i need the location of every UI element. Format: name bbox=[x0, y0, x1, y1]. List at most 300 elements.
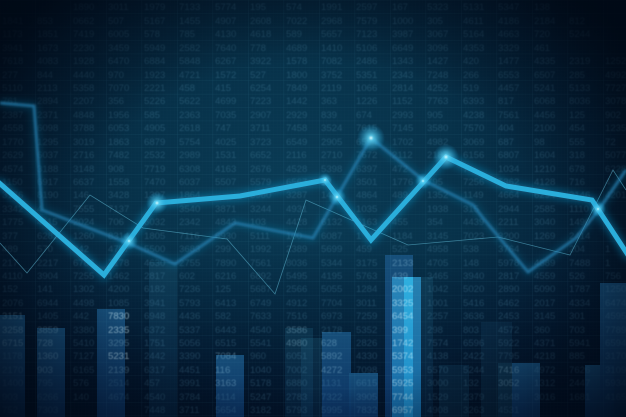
number table: 3145 bbox=[534, 311, 555, 322]
number table: 455 bbox=[392, 217, 408, 228]
thin line bbox=[0, 170, 626, 294]
number table: 7145 bbox=[392, 123, 413, 134]
number table: 2100 bbox=[534, 123, 555, 134]
bar 8 bbox=[349, 373, 378, 417]
main thick line bbox=[0, 157, 626, 275]
number table: 5351 bbox=[356, 70, 377, 81]
number table: 905 bbox=[427, 110, 443, 121]
number table: 4238 bbox=[463, 110, 484, 121]
number table: 301 bbox=[569, 311, 585, 322]
number table: 6254 bbox=[250, 83, 272, 94]
number table: 5495 bbox=[286, 271, 307, 282]
number table: 360 bbox=[534, 325, 550, 336]
number table: 6917 bbox=[37, 177, 58, 188]
number table: 100 bbox=[286, 231, 302, 242]
number table: 6948 bbox=[144, 311, 165, 322]
number table: 2002 bbox=[392, 284, 413, 295]
number table: 5056 bbox=[179, 338, 200, 349]
number table: 6317 bbox=[144, 365, 165, 376]
number table: 7570 bbox=[463, 123, 484, 134]
number table: 4110 bbox=[2, 271, 23, 282]
number table: 1042 bbox=[427, 284, 448, 295]
number table: 3000 bbox=[427, 378, 448, 389]
number table: 6880 bbox=[286, 378, 307, 389]
number table: 1742 bbox=[392, 338, 413, 349]
number table: 363 bbox=[321, 96, 337, 107]
number table: 3941 bbox=[144, 298, 165, 309]
number table: 7133 bbox=[179, 2, 200, 13]
number table: 5774 bbox=[215, 2, 237, 13]
number table: 1149 bbox=[463, 190, 484, 201]
number table: 7098 bbox=[356, 365, 377, 376]
bar 9 bbox=[385, 255, 413, 417]
number table: 703 bbox=[569, 325, 585, 336]
number table: 585 bbox=[144, 110, 160, 121]
number table: 2389 bbox=[286, 244, 307, 255]
number table: 7419 bbox=[73, 29, 94, 40]
number table: 1405 bbox=[37, 311, 58, 322]
number table: 5111 bbox=[250, 231, 270, 242]
number table: 8036 bbox=[286, 258, 307, 269]
number table: 3011 bbox=[108, 2, 129, 13]
number table: 6594 bbox=[605, 338, 626, 349]
number table: 420 bbox=[463, 56, 479, 67]
number table: 204 bbox=[569, 244, 586, 255]
number table: 18 bbox=[321, 177, 332, 188]
number table: 1 bbox=[605, 244, 610, 255]
number table: 3019 bbox=[73, 137, 94, 148]
number table: 4699 bbox=[215, 96, 236, 107]
number table: 7259 bbox=[356, 311, 377, 322]
number table: 3146 bbox=[569, 190, 590, 201]
number table: 5922 bbox=[498, 338, 519, 349]
number table: 1604 bbox=[534, 150, 556, 161]
number table: 2486 bbox=[356, 56, 377, 67]
number table: 3752 bbox=[321, 70, 342, 81]
number table: 0662 bbox=[73, 16, 94, 27]
number table: 574 bbox=[286, 2, 303, 13]
number table: 356 bbox=[108, 96, 124, 107]
number table: 716 bbox=[569, 177, 585, 188]
number table: 7022 bbox=[286, 16, 307, 27]
number table: 2514 bbox=[108, 378, 130, 389]
number table: 1343 bbox=[392, 56, 413, 67]
number table: 4843 bbox=[215, 217, 236, 228]
number table: 4992 bbox=[605, 70, 626, 81]
number table: 970 bbox=[108, 70, 124, 81]
number table: 3342 bbox=[2, 204, 23, 215]
number table: 1751 bbox=[144, 338, 165, 349]
bar 2 bbox=[37, 328, 65, 417]
number table: 752 bbox=[2, 405, 18, 416]
number table: 6413 bbox=[215, 298, 236, 309]
number table: 1673 bbox=[37, 43, 58, 54]
number table: 217 bbox=[2, 258, 18, 269]
number table: 2343 bbox=[392, 70, 413, 81]
number table: 2379 bbox=[463, 392, 484, 403]
number table: 354 bbox=[427, 217, 444, 228]
number table: 4864 bbox=[356, 190, 378, 201]
number table: 3784 bbox=[179, 392, 201, 403]
number table: 853 bbox=[37, 16, 53, 27]
number table: 4611 bbox=[463, 16, 484, 27]
number table: 7618 bbox=[2, 56, 23, 67]
number table: 2968 bbox=[321, 16, 342, 27]
number table: 7516 bbox=[286, 311, 307, 322]
number table: 2024 bbox=[73, 217, 95, 228]
number table: 2184 bbox=[534, 16, 556, 27]
number table: 885 bbox=[569, 351, 585, 362]
number table: 3465 bbox=[427, 271, 448, 282]
number table: 778 bbox=[250, 43, 266, 54]
number table: 5110 bbox=[2, 83, 23, 94]
number table: 2112 bbox=[392, 150, 413, 161]
number table: 415 bbox=[215, 83, 231, 94]
number table: 6098 bbox=[37, 123, 58, 134]
bar 7 bbox=[322, 332, 351, 417]
number table: 7789 bbox=[605, 325, 626, 336]
bar chart bbox=[0, 255, 626, 417]
number table: 1 bbox=[356, 231, 361, 242]
number table: 2221 bbox=[144, 83, 165, 94]
number table: 5763 bbox=[356, 271, 377, 282]
number table: 2618 bbox=[179, 123, 200, 134]
number table: 527 bbox=[250, 70, 266, 81]
number table: 7002 bbox=[286, 365, 307, 376]
number table: 3188 bbox=[37, 164, 58, 175]
number table: 461 bbox=[534, 43, 550, 54]
number table: 4 bbox=[37, 204, 43, 215]
number table: 3991 bbox=[179, 378, 200, 389]
number table: 7719 bbox=[144, 164, 165, 175]
number table: 1284 bbox=[356, 284, 378, 295]
number table: 678 bbox=[569, 164, 585, 175]
number table: 6649 bbox=[392, 43, 413, 54]
number table: 2116 bbox=[286, 150, 307, 161]
number table: 602 bbox=[179, 271, 195, 282]
number table: 472 bbox=[392, 164, 408, 175]
number table: 4451 bbox=[179, 365, 200, 376]
bottom shading bbox=[0, 240, 626, 417]
number table: 4972 bbox=[534, 365, 555, 376]
number table: 7640 bbox=[215, 43, 236, 54]
number table: 3987 bbox=[392, 29, 413, 40]
number table: 7123 bbox=[356, 29, 377, 40]
number table: 7322 bbox=[321, 392, 342, 403]
number table: 5231 bbox=[108, 351, 129, 362]
number table: 4905 bbox=[144, 123, 165, 134]
number table: 5344 bbox=[321, 258, 343, 269]
number table: 3940 bbox=[463, 271, 484, 282]
number table: 4674 bbox=[108, 392, 130, 403]
number table: 5090 bbox=[534, 284, 555, 295]
number table: 526 bbox=[569, 271, 585, 282]
number table: 3325 bbox=[392, 298, 413, 309]
number table: 1923 bbox=[144, 70, 165, 81]
number table: 5949 bbox=[144, 43, 165, 54]
number table: 7070 bbox=[108, 83, 129, 94]
number table: 3711 bbox=[250, 123, 271, 134]
number table: 628 bbox=[321, 338, 337, 349]
number table: 6884 bbox=[144, 56, 166, 67]
number table: 1462 bbox=[108, 271, 129, 282]
number table: 7023 bbox=[463, 231, 484, 242]
number table: 5167 bbox=[144, 16, 165, 27]
number table: 942 bbox=[73, 244, 89, 255]
number table: 5106 bbox=[356, 43, 377, 54]
number table: 1928 bbox=[73, 56, 94, 67]
number table: 7890 bbox=[215, 258, 236, 269]
number table: 298 bbox=[427, 325, 443, 336]
number table: 2814 bbox=[392, 83, 414, 94]
number table: 2890 bbox=[498, 284, 519, 295]
number table: 6037 bbox=[179, 177, 200, 188]
bar 13 bbox=[600, 283, 626, 417]
number table: 761 bbox=[2, 96, 18, 107]
number table: 5323 bbox=[427, 2, 448, 13]
number table: 3636 bbox=[463, 311, 484, 322]
number table: 7832 bbox=[356, 405, 377, 416]
number table: 5570 bbox=[427, 365, 448, 376]
number table: 299 bbox=[215, 244, 231, 255]
number table: 5622 bbox=[179, 96, 200, 107]
number table: 5507 bbox=[215, 177, 236, 188]
number table: 148 bbox=[463, 258, 479, 269]
number table: 1775 bbox=[2, 217, 23, 228]
number table: 98 bbox=[534, 137, 545, 148]
number table: 5657 bbox=[321, 29, 342, 40]
number table: 6454 bbox=[392, 311, 414, 322]
number table: 457 bbox=[144, 378, 160, 389]
number table: 3329 bbox=[498, 43, 519, 54]
number table: 1938 bbox=[427, 204, 448, 215]
number table: 315 bbox=[463, 204, 479, 215]
number table: 6549 bbox=[286, 137, 307, 148]
number table: 4115 bbox=[37, 217, 58, 228]
number table: 7127 bbox=[73, 351, 94, 362]
number table: 6944 bbox=[37, 298, 59, 309]
number table: 4574 bbox=[2, 164, 24, 175]
number table: 1991 bbox=[321, 2, 342, 13]
number table: 3151 bbox=[2, 311, 23, 322]
number table: 2363 bbox=[179, 110, 200, 121]
number table: 2905 bbox=[321, 137, 342, 148]
number table: 7561 bbox=[250, 258, 271, 269]
number table: 1235 bbox=[605, 123, 626, 134]
number table: 4439 bbox=[463, 217, 484, 228]
number table: 2342 bbox=[179, 217, 200, 228]
number table: 6397 bbox=[356, 164, 377, 175]
number table: 2076 bbox=[2, 298, 23, 309]
number table: 7633 bbox=[250, 311, 271, 322]
number table: 3263 bbox=[463, 405, 484, 416]
number table: 1531 bbox=[215, 150, 236, 161]
number table: 674 bbox=[356, 110, 373, 121]
number table: 3922 bbox=[250, 56, 271, 67]
number table: 3163 bbox=[215, 378, 236, 389]
number table: 7672 bbox=[356, 150, 377, 161]
bar 10 bbox=[392, 277, 421, 417]
number table: 1864 bbox=[179, 190, 201, 201]
number table: 3175 bbox=[356, 258, 377, 269]
number table: 6282 bbox=[37, 231, 58, 242]
number table: 3788 bbox=[73, 123, 94, 134]
number table: 5352 bbox=[356, 325, 377, 336]
number table: 1578 bbox=[286, 56, 307, 67]
number table: 7116 bbox=[179, 231, 200, 242]
number table: 1360 bbox=[37, 351, 58, 362]
number table: 6393 bbox=[463, 96, 484, 107]
number table: 803 bbox=[463, 325, 479, 336]
number table: 3148 bbox=[73, 164, 94, 175]
number table: 4252 bbox=[427, 83, 448, 94]
number table: 3459 bbox=[108, 43, 129, 54]
number table: 785 bbox=[179, 29, 195, 40]
number table: 7256 bbox=[463, 177, 484, 188]
number table: 2532 bbox=[144, 150, 165, 161]
number table: 4889 bbox=[534, 258, 555, 269]
number table: 1312 bbox=[534, 378, 555, 389]
number table: 5699 bbox=[321, 244, 342, 255]
number table: 141 bbox=[37, 284, 53, 295]
number table: 6749 bbox=[250, 298, 271, 309]
number table: 4201 bbox=[605, 190, 626, 201]
number table: 3380 bbox=[73, 325, 94, 336]
number table: 3764 bbox=[498, 244, 520, 255]
number table: 7448 bbox=[144, 405, 165, 416]
number table: 4371 bbox=[534, 338, 555, 349]
bar 1 bbox=[0, 315, 25, 417]
number table: 4618 bbox=[250, 29, 271, 40]
number table: 4163 bbox=[215, 164, 236, 175]
number table: 3145 bbox=[427, 231, 448, 242]
number table: 2710 bbox=[321, 150, 342, 161]
number table: 6372 bbox=[144, 325, 165, 336]
number table: 6037 bbox=[37, 150, 58, 161]
number table: 116 bbox=[215, 365, 230, 376]
number table: 1260 bbox=[73, 231, 94, 242]
number table: 399 bbox=[392, 325, 408, 336]
number table: 318 bbox=[569, 150, 585, 161]
number table: 4130 bbox=[215, 29, 236, 40]
number table: 720 bbox=[534, 29, 550, 40]
number table: 1150 bbox=[2, 177, 23, 188]
number table: 7137 bbox=[108, 204, 129, 215]
bar 12 bbox=[585, 365, 614, 417]
number table: 2422 bbox=[463, 351, 484, 362]
number table: 152 bbox=[2, 284, 18, 295]
number table: 3078 bbox=[605, 96, 626, 107]
number table: 795 bbox=[427, 177, 443, 188]
number table: 4195 bbox=[321, 271, 342, 282]
number table: 1001 bbox=[427, 298, 448, 309]
number table: 6892 bbox=[250, 271, 271, 282]
number table: 1252 bbox=[605, 56, 626, 67]
number table: 1787 bbox=[569, 284, 590, 295]
number table: 2582 bbox=[179, 43, 200, 54]
number table: 4958 bbox=[427, 244, 448, 255]
number table: 1250 bbox=[605, 284, 626, 295]
number table: 4025 bbox=[215, 137, 236, 148]
number table: 3871 bbox=[215, 204, 236, 215]
number table: 4648 bbox=[498, 392, 519, 403]
number table: 4334 bbox=[569, 298, 591, 309]
number table: 6637 bbox=[73, 177, 94, 188]
number table: 5374 bbox=[392, 351, 414, 362]
number table: 6308 bbox=[179, 164, 200, 175]
number table: 4330 bbox=[356, 351, 377, 362]
number table: 2119 bbox=[321, 83, 342, 94]
number table: 5247 bbox=[250, 392, 271, 403]
number table: 1770 bbox=[2, 137, 23, 148]
number table: 8190 bbox=[37, 190, 58, 201]
number table: 1776 bbox=[392, 177, 413, 188]
number table: 1979 bbox=[144, 2, 165, 13]
number table: 2017 bbox=[534, 298, 555, 309]
number table: 7615 bbox=[356, 123, 377, 134]
number table: 489 bbox=[2, 244, 18, 255]
number table: 5500 bbox=[144, 244, 165, 255]
number table: 2257 bbox=[427, 311, 448, 322]
number table: 6005 bbox=[108, 29, 129, 40]
number table: 1 bbox=[605, 258, 610, 269]
number table: 3016 bbox=[534, 392, 555, 403]
number table: 2387 bbox=[2, 110, 23, 121]
number table: 6068 bbox=[534, 96, 555, 107]
number table: 125 bbox=[215, 284, 231, 295]
number table: 4559 bbox=[534, 271, 555, 282]
number table: 3069 bbox=[463, 137, 484, 148]
number table: 3052 bbox=[498, 378, 519, 389]
number table: 7 bbox=[463, 164, 468, 175]
number table: 4531 bbox=[498, 405, 519, 416]
number table: 6294 bbox=[534, 190, 556, 201]
number table: 4595 bbox=[605, 311, 626, 322]
number table: 3904 bbox=[37, 271, 59, 282]
number table: 4335 bbox=[534, 56, 555, 67]
number table: 454 bbox=[569, 123, 586, 134]
number table: 3287 bbox=[286, 190, 307, 201]
number table: 7626 bbox=[569, 365, 590, 376]
number table: 3295 bbox=[108, 338, 129, 349]
number table: 6807 bbox=[498, 150, 519, 161]
number table: 2170 bbox=[2, 365, 23, 376]
number table: 1442 bbox=[286, 96, 307, 107]
number table: 4721 bbox=[179, 70, 200, 81]
number table: 7830 bbox=[108, 311, 129, 322]
number table: 132 bbox=[463, 378, 479, 389]
number table: 7255 bbox=[73, 271, 94, 282]
number table: 4138 bbox=[427, 351, 448, 362]
number table: 578 bbox=[144, 29, 160, 40]
number table: 7795 bbox=[498, 351, 519, 362]
number table: 728 bbox=[37, 338, 53, 349]
number table: 817 bbox=[498, 96, 514, 107]
number table: 6051 bbox=[286, 351, 307, 362]
number table: 6652 bbox=[250, 150, 271, 161]
number table: 5244 bbox=[463, 365, 485, 376]
number table: 2929 bbox=[286, 110, 307, 121]
number table: 459 bbox=[356, 244, 372, 255]
number table: 7579 bbox=[356, 16, 377, 27]
number table: 7458 bbox=[286, 123, 307, 134]
number table: 4630 bbox=[144, 258, 165, 269]
number table: 3524 bbox=[321, 123, 343, 134]
number table: 6156 bbox=[463, 150, 484, 161]
number table: 5995 bbox=[321, 405, 342, 416]
number table: 1226 bbox=[356, 96, 377, 107]
number table: 1681 bbox=[569, 392, 590, 403]
